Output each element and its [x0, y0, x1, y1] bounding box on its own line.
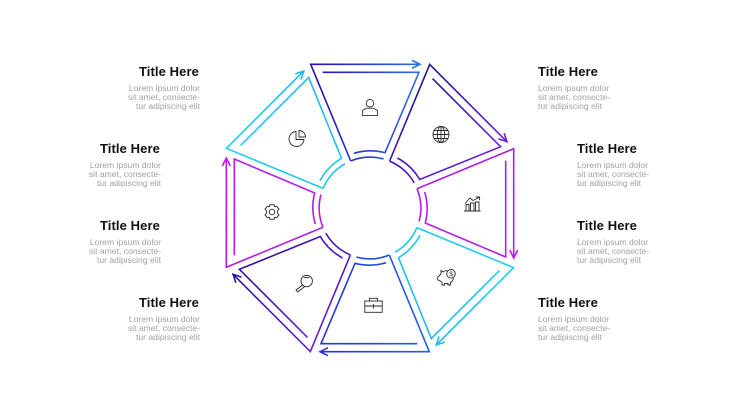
body text: sit amet, consecte-: [538, 323, 610, 333]
body text: Lorem ipsum dolor: [129, 83, 200, 93]
title: Title Here: [139, 64, 199, 79]
segment: top left: [224, 68, 372, 217]
body text: [577, 237, 649, 265]
body text: sit amet, consecte-: [577, 169, 649, 179]
body text: tur adipiscing elit: [577, 255, 641, 265]
text block: lower middle left: [89, 218, 161, 265]
body text: sit amet, consecte-: [538, 92, 610, 102]
body text: sit amet, consecte-: [89, 169, 161, 179]
text block: lower middle right: [577, 218, 649, 265]
body text: sit amet, consecte-: [128, 323, 200, 333]
title: Title Here: [577, 141, 637, 156]
body text: sit amet, consecte-: [128, 92, 200, 102]
body text: sit amet, consecte-: [89, 246, 161, 256]
icon: pie chart: [289, 130, 306, 146]
icon: globe: [433, 126, 449, 142]
icon: piggy bank with coin: [438, 270, 455, 285]
body text: tur adipiscing elit: [97, 178, 161, 188]
text block: bottom left: [128, 295, 200, 342]
body text: [128, 83, 200, 111]
body text: Lorem ipsum dolor: [577, 160, 648, 170]
segment: left: [222, 158, 323, 267]
text block: bottom right: [538, 295, 610, 342]
title: Title Here: [577, 218, 637, 233]
title: Title Here: [100, 218, 160, 233]
segment: top right: [361, 62, 510, 210]
body text: tur adipiscing elit: [538, 101, 602, 111]
body text: Lorem ipsum dolor: [90, 237, 161, 247]
body text: [538, 83, 610, 111]
body text: Lorem ipsum dolor: [538, 314, 609, 324]
segment: bottom right: [368, 199, 516, 348]
icon: piggy bank with coin: $: [449, 271, 453, 278]
body text: tur adipiscing elit: [136, 101, 200, 111]
segment: right: [417, 149, 518, 258]
body text: tur adipiscing elit: [136, 332, 200, 342]
segment: bottom left: [230, 206, 379, 354]
title: Title Here: [100, 141, 160, 156]
icon: briefcase: [365, 298, 382, 312]
body text: tur adipiscing elit: [538, 332, 602, 342]
body text: [577, 160, 649, 188]
icon: magnifier: [296, 275, 312, 292]
body text: [538, 314, 610, 342]
icon: gear: [265, 205, 279, 219]
body text: [128, 314, 200, 342]
body text: tur adipiscing elit: [577, 178, 641, 188]
text block: upper middle right: [577, 141, 649, 188]
title: Title Here: [538, 295, 598, 310]
body text: Lorem ipsum dolor: [90, 160, 161, 170]
text block: upper middle left: [89, 141, 161, 188]
body text: Lorem ipsum dolor: [538, 83, 609, 93]
body text: tur adipiscing elit: [97, 255, 161, 265]
body text: Lorem ipsum dolor: [129, 314, 200, 324]
title: Title Here: [538, 64, 598, 79]
segment: bottom: [320, 255, 429, 356]
text block: top right: [538, 64, 610, 111]
body text: Lorem ipsum dolor: [577, 237, 648, 247]
icon: person: [362, 99, 378, 116]
body text: [89, 160, 161, 188]
body text: [89, 237, 161, 265]
icon: bar chart with arrow: [464, 197, 480, 211]
title: Title Here: [139, 295, 199, 310]
text block: top left: [128, 64, 200, 111]
body text: sit amet, consecte-: [577, 246, 649, 256]
segment: top: [311, 60, 420, 161]
